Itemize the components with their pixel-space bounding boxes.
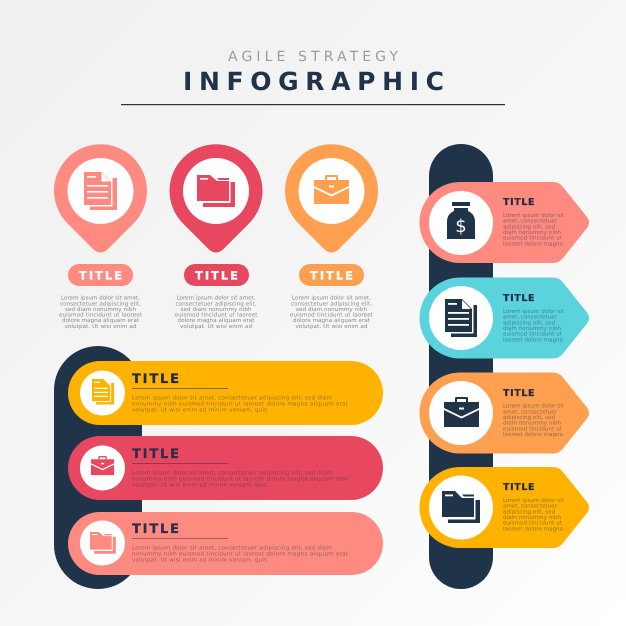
bar 1 text: nonummy nibh euismod tincidunt ut laoreet dolore magna aliquam erat [132,400,349,408]
text block 2 [174,295,258,330]
icon: folder [197,175,235,207]
icon: money bag: $ [455,216,467,237]
panel: pin column 2 [170,144,262,330]
title pill 1: TITLE [79,268,122,282]
bar 2 text: nonummy nibh euismod tincidunt ut laoreet dolore magna aliquam erat [132,476,349,482]
icon: folder large [442,491,480,523]
text block 3: euismod tincidunt ut laoreet [290,312,374,319]
tag 2 title: TITLE [503,293,534,304]
tag 1 title: TITLE [503,197,534,208]
bar 2 text [132,470,349,488]
panel: tag 2 [420,278,589,358]
tag 2 text: laoreet dolore magna [503,336,563,343]
panel: tag 3 [420,372,589,454]
tag 3 text: adipiscing elit, sed [503,414,555,421]
text block 1 [59,295,143,330]
bar 2 text: volutpat. Ut wisi enim ad minim veniam, quis [132,482,267,488]
tag 4 text: laoreet dolore magna [503,525,563,532]
tag 2 text: adipiscing elit, sed [503,319,555,326]
tag 3 text: Lorem ipsum dolor sit [503,403,565,410]
bar 3 text: volutpat. Ut wisi enim ad minim veniam, quis [132,556,267,564]
pin marker 3 [285,144,378,252]
navy backing: right [429,144,493,589]
tag 3 text: laoreet dolore magna [503,431,563,438]
text block 1: volutpat. Ut wisi enim ad [64,323,137,330]
pin marker 2 [170,144,262,252]
tag 2 text [503,308,565,343]
text block 2: Lorem ipsum dolor sit amet, [176,295,256,302]
text block 1: sed diam nonummy nibh [65,306,136,313]
bar 3 title: TITLE [132,522,179,537]
bar 1 title: TITLE [132,372,179,387]
tag 3 text [503,403,565,438]
tag 1 text: euismod tincidunt ut [503,235,563,242]
text block 2: volutpat. Ut wisi enim ad [180,323,252,330]
icon: money bag [447,202,475,239]
icon: document [84,172,117,210]
title pill 3: TITLE [310,268,353,282]
tag 2 text: diam nonummy nibh [503,325,561,332]
tag 2 text: euismod tincidunt ut [503,331,563,338]
bar 3 text: nonummy nibh euismod tincidunt ut laoreet dolore magna aliquam erat [132,550,349,558]
icon: briefcase large [444,397,479,427]
icon: folder small [90,532,116,554]
pin marker 1 [54,144,147,252]
tag 4 text: adipiscing elit, sed [503,508,555,515]
panel: tag 1 [420,182,589,263]
tag 4 text: Lorem ipsum dolor sit [503,497,565,504]
icon: briefcase small [91,456,114,475]
text block 3: Lorem ipsum dolor sit amet, [292,295,371,302]
text block 2: dolore magna aliquam erat [178,317,255,324]
tag 3 text: euismod tincidunt ut [503,425,563,432]
subtitle: AGILE STRATEGY [228,49,398,65]
tag 3 text: diam nonummy nibh [503,420,561,427]
tag 2 text: amet, consectetuer [503,315,558,321]
tag 1 text: diam nonummy nibh [503,229,561,236]
icon: document small [92,379,114,404]
bar 2 title: TITLE [132,447,179,462]
tag 4 text [503,497,565,532]
tag 1 text: amet, consectetuer [503,219,558,225]
title: INFOGRAPHIC [183,67,444,96]
text block 3 [290,295,374,330]
tag 3 text: amet, consectetuer [503,409,558,415]
text block 2: consectetuer adipiscing elit, [176,300,257,307]
tag 1 text [503,212,565,247]
panel: bar 3 [68,512,383,575]
tag 1 text: adipiscing elit, sed [503,223,555,230]
panel: bar 2 [68,436,383,500]
bar 1 text: Lorem ipsum dolor sit amet, consectetuer adipiscing elit, sed diam [132,394,332,402]
text block 1: euismod tincidunt ut laoreet [59,312,143,319]
bar 3 text: Lorem ipsum dolor sit amet, consectetuer adipiscing elit, sed diam [132,544,332,552]
text block 3: consectetuer adipiscing elit, [291,300,372,307]
bar 2 text: Lorem ipsum dolor sit amet, consectetuer adipiscing elit, sed diam [132,470,332,476]
tag 4 text: amet, consectetuer [503,504,558,510]
icon: document large [445,299,477,337]
text block 3: sed diam nonummy nibh [296,306,367,313]
tag 4 text: euismod tincidunt ut [503,520,563,527]
bar 1 text [132,394,349,414]
tag 1 text: Lorem ipsum dolor sit [503,212,565,219]
panel: pin column 1 [54,144,147,330]
text block 1: consectetuer adipiscing elit, [60,300,141,307]
text block 3: volutpat. Ut wisi enim ad [296,323,368,330]
panel: pin column 3 [285,144,378,330]
text block 1: Lorem ipsum dolor sit amet, [61,295,140,302]
tag 4 text: diam nonummy nibh [503,514,561,521]
tag 2 text: Lorem ipsum dolor sit [503,308,565,315]
text block 2: euismod tincidunt ut laoreet [174,312,258,319]
navy backing: left [54,346,142,589]
title pill 2 [184,264,249,286]
text block 1: dolore magna aliquam erat [62,317,140,324]
bar 3 text [132,544,349,564]
tag 3 title: TITLE [503,388,534,399]
text block 3: dolore magna aliquam erat [293,317,371,324]
icon: briefcase [314,175,349,204]
tag 1 text: laoreet dolore magna [503,240,563,247]
text block 2: sed diam nonummy nibh [180,306,252,313]
tag 4 title: TITLE [503,482,534,493]
panel: bar 1 [68,361,383,425]
bar 1 text: volutpat. Ut wisi enim ad minim veniam, quis [132,406,267,414]
title pill 2: TITLE [195,268,238,282]
title pill 3 [299,264,364,286]
panel: tag 4 [420,467,589,548]
title pill 1 [68,264,133,286]
